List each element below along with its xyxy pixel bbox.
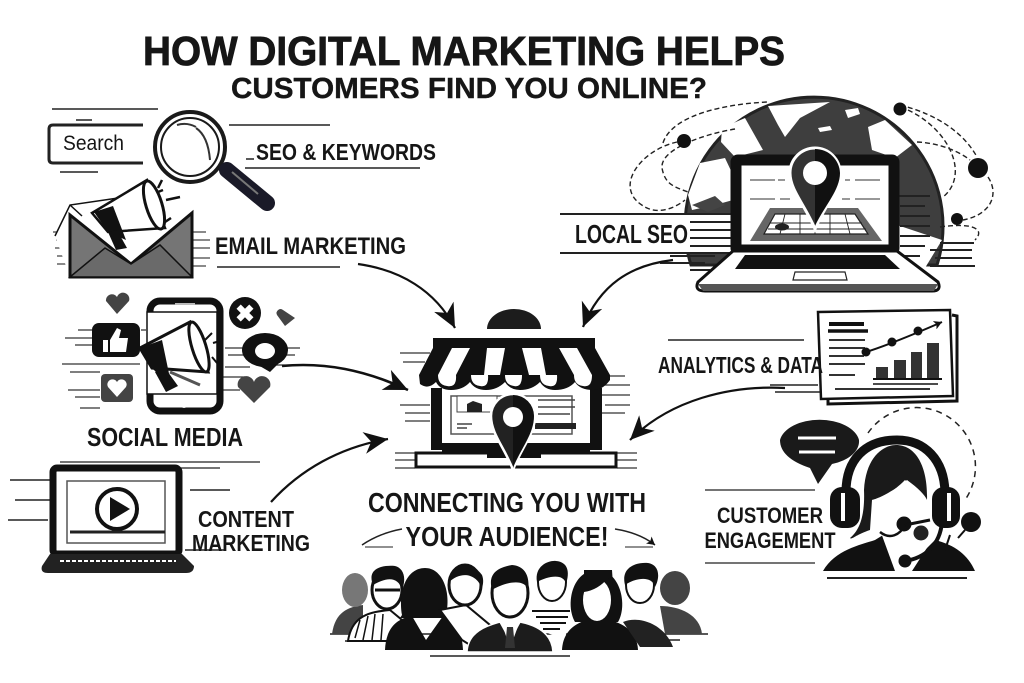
icon: globe with orbit paths [630, 97, 993, 268]
arrow: social to store [282, 365, 408, 390]
icon: laptop with video play button [8, 468, 230, 573]
icon: search bar with magnifying glass [49, 109, 267, 203]
title: CUSTOMERS FIND YOU ONLINE? [231, 73, 707, 105]
icon: audience crowd [330, 561, 708, 656]
icon: customer support agent with headset [780, 408, 981, 578]
title [143, 28, 785, 105]
arrow: email to store [358, 264, 455, 328]
icon: envelope with megaphone [53, 179, 210, 277]
icon: storefront with awning and pin [395, 309, 637, 470]
icon: laptop with location pin [697, 148, 939, 291]
icon: phone with megaphone and social reactions [62, 293, 310, 411]
heading: Connecting you with your audience: YOUR AUDIENCE! [406, 521, 608, 552]
label: SEO & Keywords [229, 125, 436, 168]
label: Email Marketing: EMAIL MARKETING [215, 233, 406, 260]
label: Local SEO [560, 214, 733, 270]
label: Social Media [60, 422, 260, 468]
heading: Connecting you with your audience: CONNECTING YOU WITH [368, 487, 646, 518]
icon: search bar with magnifying glass: Search [63, 132, 124, 155]
heading: Connecting you with your audience [362, 487, 655, 552]
label: Customer Engagement: CUSTOMER [717, 503, 823, 528]
label: Analytics & Data: ANALYTICS & DATA [658, 352, 823, 378]
arrow: content to store [271, 439, 388, 502]
title: HOW DIGITAL MARKETING HELPS [143, 28, 785, 74]
label: Local SEO: LOCAL SEO [575, 219, 688, 249]
label: Customer Engagement: ENGAGEMENT [704, 528, 836, 553]
label: Customer Engagement [704, 490, 836, 563]
arrow: local SEO to store [583, 260, 673, 327]
label: SEO & Keywords: SEO & KEYWORDS [256, 139, 436, 165]
label: Content Marketing: MARKETING [192, 530, 310, 556]
icon: analytics report with bar chart [818, 310, 957, 404]
label: Analytics & Data [658, 340, 823, 392]
label: Social Media: SOCIAL MEDIA [87, 422, 243, 452]
arrow: analytics to store [630, 388, 785, 440]
label: Content Marketing [192, 506, 310, 556]
label: Content Marketing: CONTENT [198, 506, 294, 532]
